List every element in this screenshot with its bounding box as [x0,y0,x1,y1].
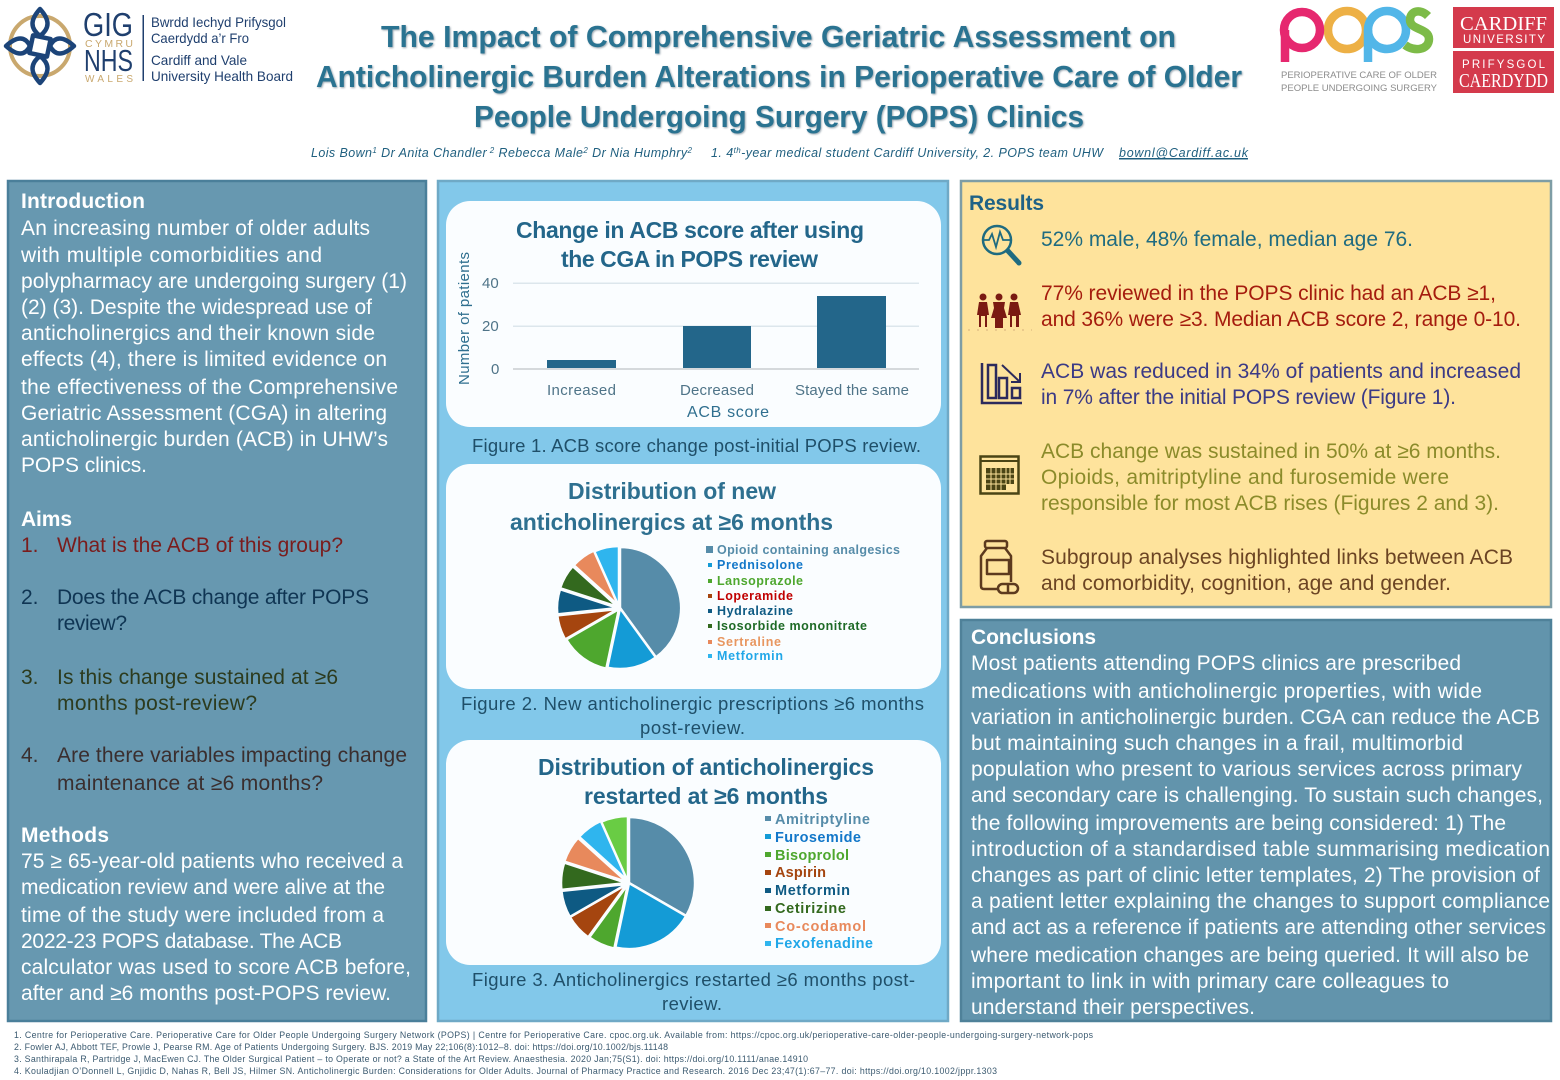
logo: Cardiff University [1453,7,1554,93]
authors and affiliations: 2 [687,146,693,155]
logo: GIG Cymru NHS Wales Cardiff and Vale: CYMRU [85,38,133,50]
pie chart [557,546,681,669]
title: Anticholinergic Burden Alterations in Perioperative Care of Older [316,59,1242,94]
logo: GIG Cymru NHS Wales Cardiff and Vale: Cardiff and Vale [151,52,247,68]
authors and affiliations: Dr Anita Chandler [377,146,488,160]
text block: conclusions [970,652,1550,1019]
caption: figure 2: Figure 2. New anticholinergic prescriptions ≥6 months [461,693,924,714]
references: 2. Fowler AJ, Abbott TEF, Prowle J, Pearse RM. Age of Patients Undergoing Surgery. BJS. 2019 May 22;106(8):1012–8. doi: https://doi.org/10.1002/bjs.11148 [14,1042,668,1052]
legend: Metformin [717,649,783,663]
text: sustained change: responsible for most ACB rises (Figures 2 and 3). [1041,492,1499,515]
references: 1. Centre for Perioperative Care. Perioperative Care for Older People Undergoing Surgery Network (POPS) | Centre for Perioperative Care. cpoc.org.uk. Available from: https://cpoc.org.uk/perioperative-care-older-people-undergoing-surgery-network-pops [14,1030,1094,1040]
legend: Loperamide [717,589,793,603]
references: 3. Santhirapala R, Partridge J, MacEwen CJ. The Older Surgical Patient – to Operate or not? a State of the Art Review. Anaesthesia. 2020 Jan;75(S1). doi: https://doi.org/10.1111/anae.14910 [14,1054,808,1064]
text block: introduction: Geriatric Assessment (CGA) in altering [21,402,387,425]
legend [765,812,873,952]
authors and affiliations: 2 [582,146,588,155]
x axis title: ACB score [687,404,769,421]
logo: GIG Cymru NHS Wales Cardiff and Vale: University Health Board [151,68,293,84]
y axis ticks [482,275,499,378]
text block: introduction: effects (4), there is limited evidence on [21,348,387,371]
authors and affiliations: Dr Nia Humphry [588,146,688,160]
text block: conclusions: where medication changes are being queried. It will also be [970,944,1529,967]
panel: figures [438,181,948,1021]
legend: Fexofenadine [775,936,873,952]
text block: introduction: anticholinergics and their known side [21,322,375,345]
category labels: Decreased [680,382,754,399]
authors and affiliations: -year medical student Cardiff University, 2. POPS team UHW [741,146,1104,160]
text block: conclusions: changes as part of clinic letter templates, 2) The provision of [971,864,1540,887]
text block: conclusions: but maintaining such changes in a frail, multimorbid [971,732,1463,755]
text block: conclusions: population who present to various services across primary [971,758,1522,781]
text block: introduction: anticholinergic burden (ACB) in UHW’s [21,428,388,451]
text: ACB prevalence: 77% reviewed in the POPS clinic had an ACB ≥1, [1041,282,1496,305]
authors and affiliations: th [734,146,741,155]
icon: medicine bottle and pill [981,541,1018,593]
text block: introduction: (2) (3). Despite the widespread use of [21,296,372,319]
text: ACB change [1041,360,1521,409]
legend [706,543,900,663]
authors and affiliations: 1. 4 [711,146,733,160]
text block: conclusions: understand their perspectives. [971,996,1255,1019]
logo: GIG Cymru NHS Wales Cardiff and Vale: NHS [84,43,133,78]
legend: Hydralazine [717,604,793,618]
text: demographics: 52% male, 48% female, median age 76. [1041,228,1413,251]
text block: conclusions: variation in anticholinergic burden. CGA can reduce the ACB [971,706,1540,729]
chart title: the CGA in POPS review [561,246,818,272]
authors and affiliations: 1 [372,146,377,155]
text block: methods: 2022-23 POPS database. The ACB [21,930,342,953]
list: aims: 2. [21,586,39,609]
text block: methods: calculator was used to score ACB before, [21,956,411,979]
list: aims: 1. [21,534,39,557]
legend: Co-codamol [775,919,866,935]
text block: introduction: the effectiveness of the Comprehensive [21,376,398,399]
list: aims: maintenance at ≥6 months? [57,772,323,795]
bars [547,296,886,368]
list: aims: Are there variables impacting change [57,744,407,767]
logo: POPS [1281,11,1438,94]
text block: conclusions: Most patients attending POPS clinics are prescribed [971,652,1461,675]
text block: conclusions: the following improvements are being considered: 1) The [971,812,1506,835]
legend: Opioid containing analgesics [717,543,900,557]
chart title [510,478,833,535]
chart title: Change in ACB score after using [516,217,864,243]
heading: Results: Results [969,192,1044,215]
card: figure 2 pie chart [446,464,941,689]
heading: Introduction: Introduction [21,190,145,213]
chart title [538,754,874,809]
logo: GIG Cymru NHS Wales Cardiff and Vale: GIG [83,6,133,43]
legend: Amitriptyline [775,812,870,828]
legend: Aspirin [775,865,826,881]
panel: results [961,181,1551,607]
title: People Undergoing Surgery (POPS) Clinics [474,99,1084,134]
logo: Cardiff University: UNIVERSITY [1463,34,1545,46]
authors and affiliations: bownl@Cardiff.ac.uk [1119,146,1249,160]
text: ACB prevalence [1041,282,1521,331]
list: aims: Is this change sustained at ≥6 [57,666,338,689]
caption: figure 2 [461,693,924,738]
text block: introduction [20,217,407,477]
logo: GIG Cymru NHS Wales Cardiff and Vale: WALES [85,74,133,85]
text block: methods: time of the study were included from a [21,904,384,927]
references: 4. Kouladjian O’Donnell L, Gnjidic D, Nahas R, Bell JS, Hilmer SN. Anticholinergic Burden: Considerations for Older Adults. Journal of Pharmacy Practice and Research. 2016 Dec 23;47(1):67–77. doi: https://doi.org/10.1002/jppr.1303 [14,1066,997,1076]
caption: figure 2: post-review. [640,717,745,738]
y axis title: Number of patients [456,252,473,385]
legend: Cetirizine [775,901,846,917]
authors and affiliations: Rebecca Male [495,146,583,160]
references [14,1030,1094,1076]
text: ACB change: in 7% after the initial POPS review (Figure 1). [1041,386,1456,409]
chart title: anticholinergics at ≥6 months [510,509,833,535]
logo: Cardiff University: CARDIFF [1460,13,1547,35]
panel: introduction, aims, methods [8,181,426,1021]
card: figure 3 pie chart [446,740,941,965]
caption: figure 3: Figure 3. Anticholinergics restarted ≥6 months post- [472,969,915,990]
text: subgroup analyses [1041,546,1513,595]
text: subgroup analyses: Subgroup analyses highlighted links between ACB [1041,546,1513,569]
chart title [516,217,864,272]
category labels: Increased [547,382,616,399]
title [316,19,1242,134]
category labels [547,382,909,399]
icon: magnifier with pulse [983,226,1019,263]
logo: GIG Cymru NHS Wales Cardiff and Vale: Bwrdd Iechyd Prifysgol [151,14,286,30]
list: aims [21,534,407,795]
authors and affiliations: Lois Bown [311,146,372,160]
text block: methods [21,850,411,1005]
text block: methods: medication review and were alive at the [21,876,385,899]
text block: introduction: polypharmacy are undergoing surgery (1) [21,270,407,293]
text block: introduction: An increasing number of older adults [21,217,370,240]
icon: declining bar chart [982,363,1022,403]
caption: figure 1: Figure 1. ACB score change post-initial POPS review. [472,435,921,456]
text block: introduction: POPS clinics. [21,454,147,477]
text block: methods: 75 ≥ 65-year-old patients who received a [21,850,403,873]
card: figure 1 bar chart [446,201,941,427]
y axis ticks: 40 [482,275,499,292]
y axis ticks: 20 [482,318,499,335]
text block: conclusions: introduction of a standardised table summarising medication [971,838,1550,861]
list: aims: 3. [21,666,39,689]
list: aims: What is the ACB of this group? [57,534,343,557]
legend: Prednisolone [717,558,803,572]
logo: POPS: PEOPLE UNDERGOING SURGERY [1281,83,1438,94]
chart title: restarted at ≥6 months [584,783,828,809]
legend: Furosemide [775,830,861,846]
text block: introduction: with multiple comorbidities and [20,244,322,267]
list: aims: months post-review? [57,692,257,715]
text block: conclusions: and act as a reference if patients are attending other services [971,916,1546,939]
category labels: Stayed the same [795,382,909,399]
text: ACB change: ACB was reduced in 34% of patients and increased [1041,360,1521,383]
text block: conclusions: a patient letter explaining the changes to support compliance [971,890,1550,913]
logo: POPS: PERIOPERATIVE CARE OF OLDER [1281,70,1437,81]
text: ACB prevalence: and 36% were ≥3. Median ACB score 2, range 0-10. [1041,308,1521,331]
icon: calendar [980,456,1019,494]
text: sustained change: ACB change was sustained in 50% at ≥6 months. [1041,440,1501,463]
heading: Methods: Methods [21,824,109,847]
list: aims: Does the ACB change after POPS [57,586,369,609]
text block: methods: after and ≥6 months post-POPS review. [21,982,391,1005]
logo: GIG Cymru NHS Wales Cardiff and Vale: Caerdydd a’r Fro [151,30,249,46]
text: sustained change [1041,440,1501,515]
legend: Isosorbide mononitrate [717,619,867,633]
list: aims: review? [57,612,127,635]
logo: GIG Cymru NHS Wales Cardiff and Vale [6,6,293,85]
heading: Aims: Aims [21,508,72,531]
chart title: Distribution of new [568,478,776,504]
text: subgroup analyses: and comorbidity, cognition, age and gender. [1041,572,1451,595]
icon: three people [968,294,1032,330]
list: aims: 4. [21,744,39,767]
heading: Conclusions: Conclusions [971,626,1096,649]
title: The Impact of Comprehensive Geriatric Assessment on [381,19,1176,54]
y axis ticks: 0 [491,361,499,378]
authors and affiliations [311,146,1249,160]
chart title: Distribution of anticholinergics [538,754,874,780]
legend: Sertraline [717,635,781,649]
text block: conclusions: and secondary care is challenging. To sustain such changes, [971,784,1543,807]
pie chart [561,816,695,949]
text block: conclusions: medications with anticholinergic properties, with wide [971,680,1482,703]
legend: Bisoprolol [775,848,849,864]
legend: Metformin [775,883,850,899]
caption: figure 3: review. [662,993,722,1014]
panel: conclusions [961,620,1551,1021]
caption: figure 3 [472,969,915,1014]
logo: Cardiff University: PRIFYSGOL [1462,59,1546,71]
legend: Lansoprazole [717,574,803,588]
authors and affiliations: 2 [487,146,495,155]
text: sustained change: Opioids, amitriptyline and furosemide were [1041,466,1449,489]
text block: conclusions: important to link in with primary care colleagues to [971,970,1449,993]
